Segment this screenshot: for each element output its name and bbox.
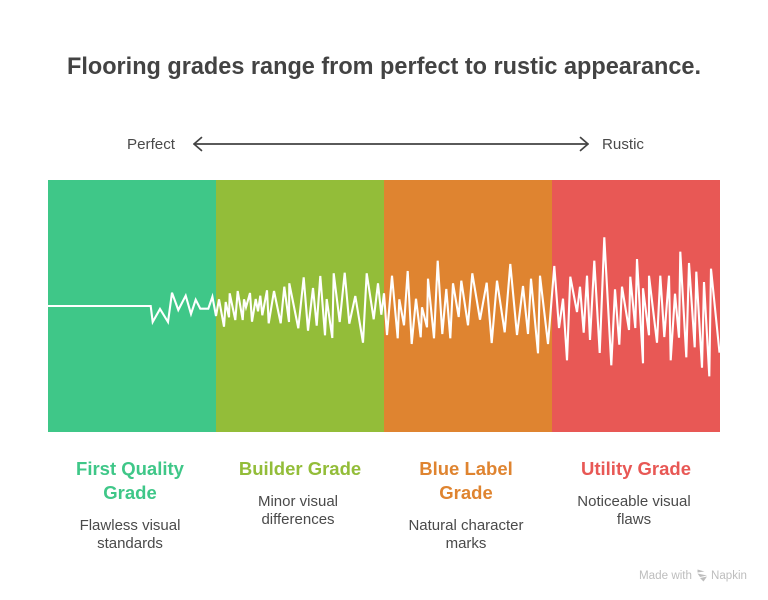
band: utility grade [552,180,720,432]
description: marks [446,535,486,552]
description: Minor visual [258,493,338,510]
watermark: made with napkin: Made with [639,570,692,582]
band: builder grade [216,180,384,432]
icon: napkin logo [698,570,707,582]
column: utility grade [577,458,691,528]
scale: perfect to rustic [127,137,644,153]
column: first quality grade [76,458,185,552]
heading: Blue Label [419,458,513,479]
watermark: made with napkin: Napkin [711,570,747,582]
column: builder grade [239,458,361,528]
heading: Utility Grade [581,458,691,479]
description: Noticeable visual [577,493,691,510]
description: differences [261,511,335,528]
description: Natural character [408,517,524,534]
heading: Builder Grade [239,458,361,479]
heading: Grade [439,482,493,503]
label: rustic: Rustic [602,137,644,153]
arrow: double-headed [194,138,588,150]
band: blue label grade [384,180,552,432]
noise line [48,237,720,376]
column: blue label grade [408,458,524,552]
label: perfect: Perfect [127,137,175,153]
band: first quality grade [48,180,216,432]
heading: First Quality [76,458,185,479]
description: Flawless visual [80,517,180,534]
description: standards [97,535,163,552]
heading: Grade [103,482,157,503]
description: flaws [617,511,651,528]
title: Flooring grades range from perfect to rustic appearance. [67,53,701,80]
watermark: made with napkin [639,570,747,582]
chart: grade bands with noise line [48,180,720,432]
